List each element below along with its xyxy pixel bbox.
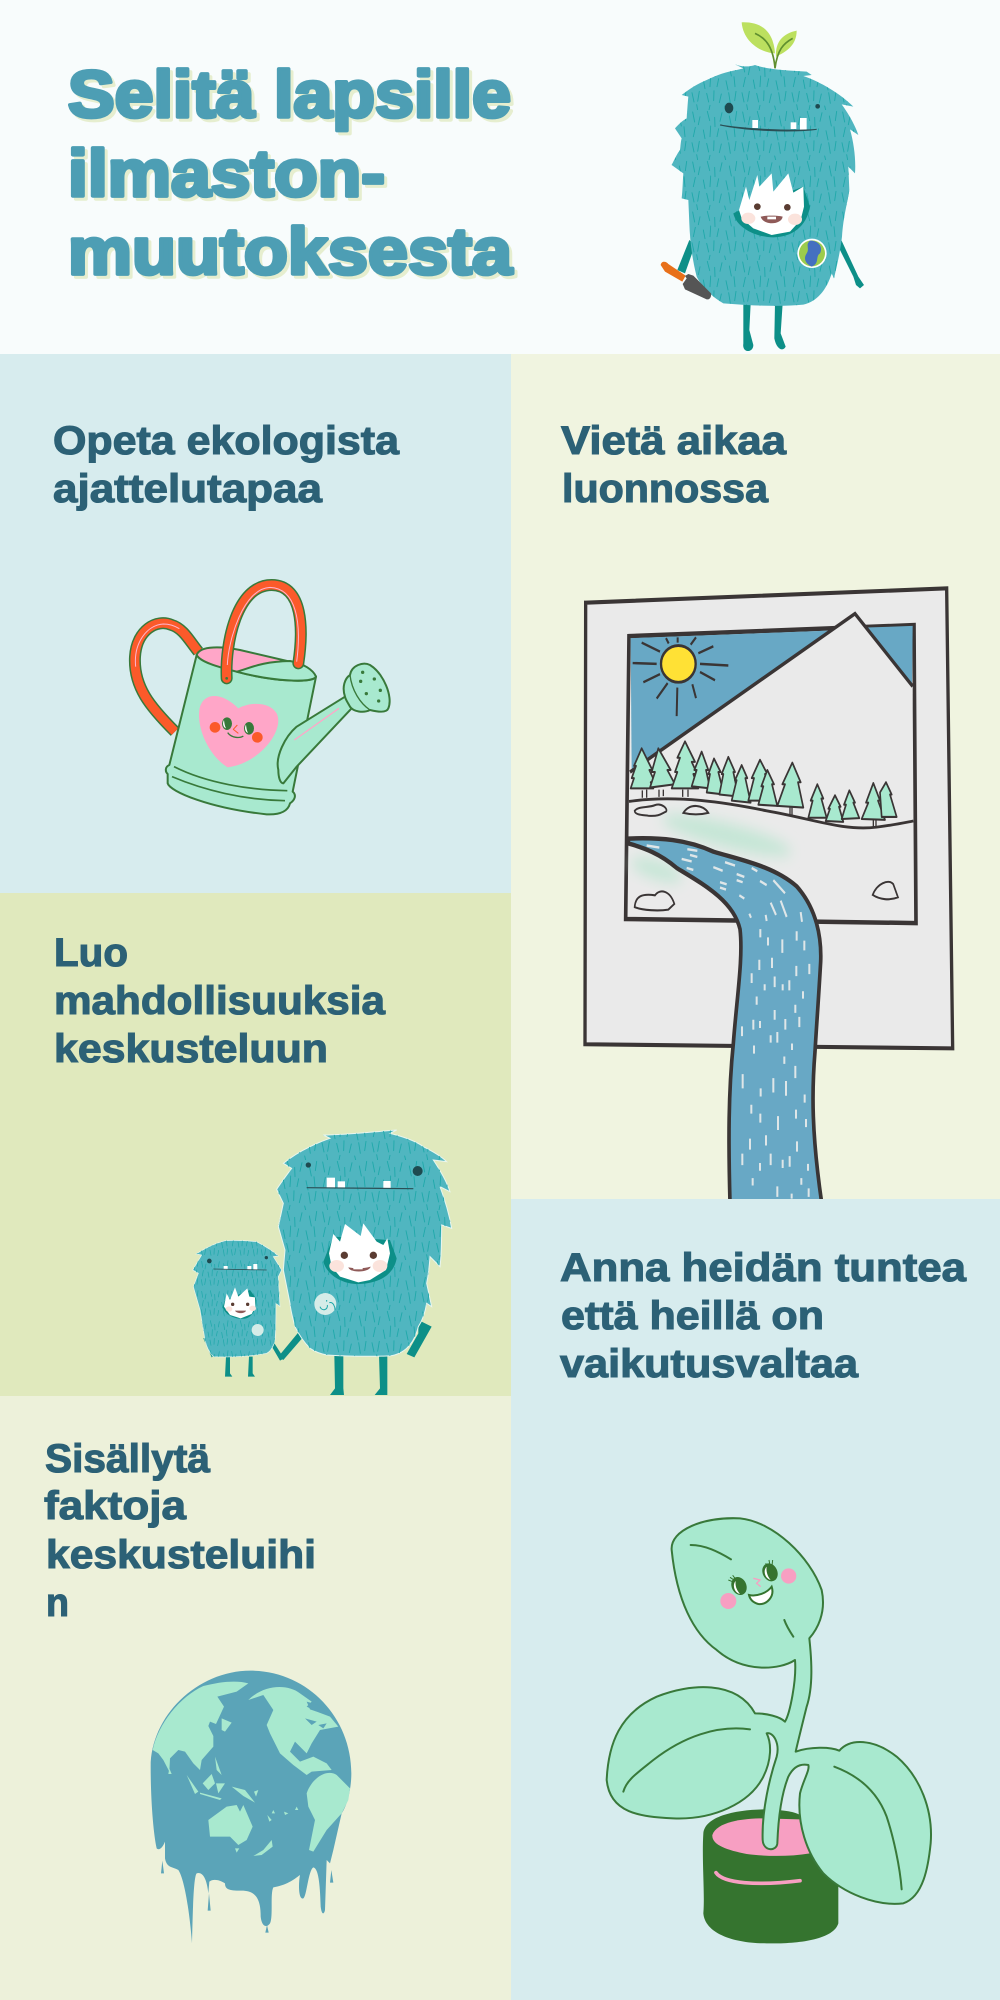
illustration: landscape picture with river xyxy=(585,588,953,1203)
icon: plant leaves and stem xyxy=(607,1518,931,1904)
icon: large monster xyxy=(277,1130,452,1395)
heading: faktoja xyxy=(44,1484,187,1528)
icon: small monster xyxy=(193,1240,284,1377)
icon: drips xyxy=(161,1861,333,1933)
title: Selitä lapsille xyxy=(68,57,511,131)
heading: Vietä aikaa xyxy=(561,419,787,463)
heading xyxy=(54,931,386,1071)
icon: plant face xyxy=(720,1560,796,1609)
panel: Luo mahdollisuuksia keskusteluun xyxy=(0,893,511,1396)
heading xyxy=(561,419,787,511)
heading: ajattelutapaa xyxy=(53,467,323,511)
icon: river xyxy=(628,838,822,1203)
icon: heart face xyxy=(199,696,278,767)
heading xyxy=(560,1246,967,1386)
heading: vaikutusvaltaa xyxy=(560,1342,859,1386)
icon: continents xyxy=(153,1682,350,1856)
panel: header xyxy=(0,0,1000,354)
icon: green pot xyxy=(703,1809,838,1943)
icon: Great Lakes and Hudson Bay xyxy=(305,1702,327,1728)
heading: Anna heidän tuntea xyxy=(560,1246,967,1290)
title: muutoksesta xyxy=(68,214,513,288)
title xyxy=(68,57,513,288)
heading: Opeta ekologista xyxy=(53,419,400,463)
illustration: smiling potted plant xyxy=(607,1518,931,1943)
heading: n xyxy=(46,1581,69,1625)
heading: keskusteluun xyxy=(54,1027,328,1071)
panel: Anna heidän tuntea xyxy=(511,1199,1000,2000)
illustration: big and small monster holding hands xyxy=(193,1130,452,1395)
icon: spout xyxy=(278,664,390,783)
heading: mahdollisuuksia xyxy=(54,979,386,1023)
icon: pine trees xyxy=(631,741,897,822)
heading: Sisällytä xyxy=(45,1437,211,1481)
heading: luonnossa xyxy=(562,467,769,511)
heading: Luo xyxy=(54,931,128,975)
heading xyxy=(53,419,400,511)
heading: keskusteluihi xyxy=(46,1533,316,1577)
title: ilmaston- xyxy=(68,136,385,210)
heading: että heillä on xyxy=(561,1294,824,1338)
icon: melting ocean sphere xyxy=(151,1671,351,1943)
illustration: watering can with heart xyxy=(135,585,390,814)
icon: furry monster with sprout, shovel and earth badge xyxy=(661,22,864,351)
panel: Opeta ekologista ajattelutapaa xyxy=(0,354,511,893)
heading xyxy=(44,1437,316,1625)
panel: Vietä aikaa luonnossa xyxy=(511,354,1000,1203)
illustration: melting globe xyxy=(151,1671,351,1943)
panel: Sisällytä faktoja keskusteluihin xyxy=(0,1396,511,2000)
